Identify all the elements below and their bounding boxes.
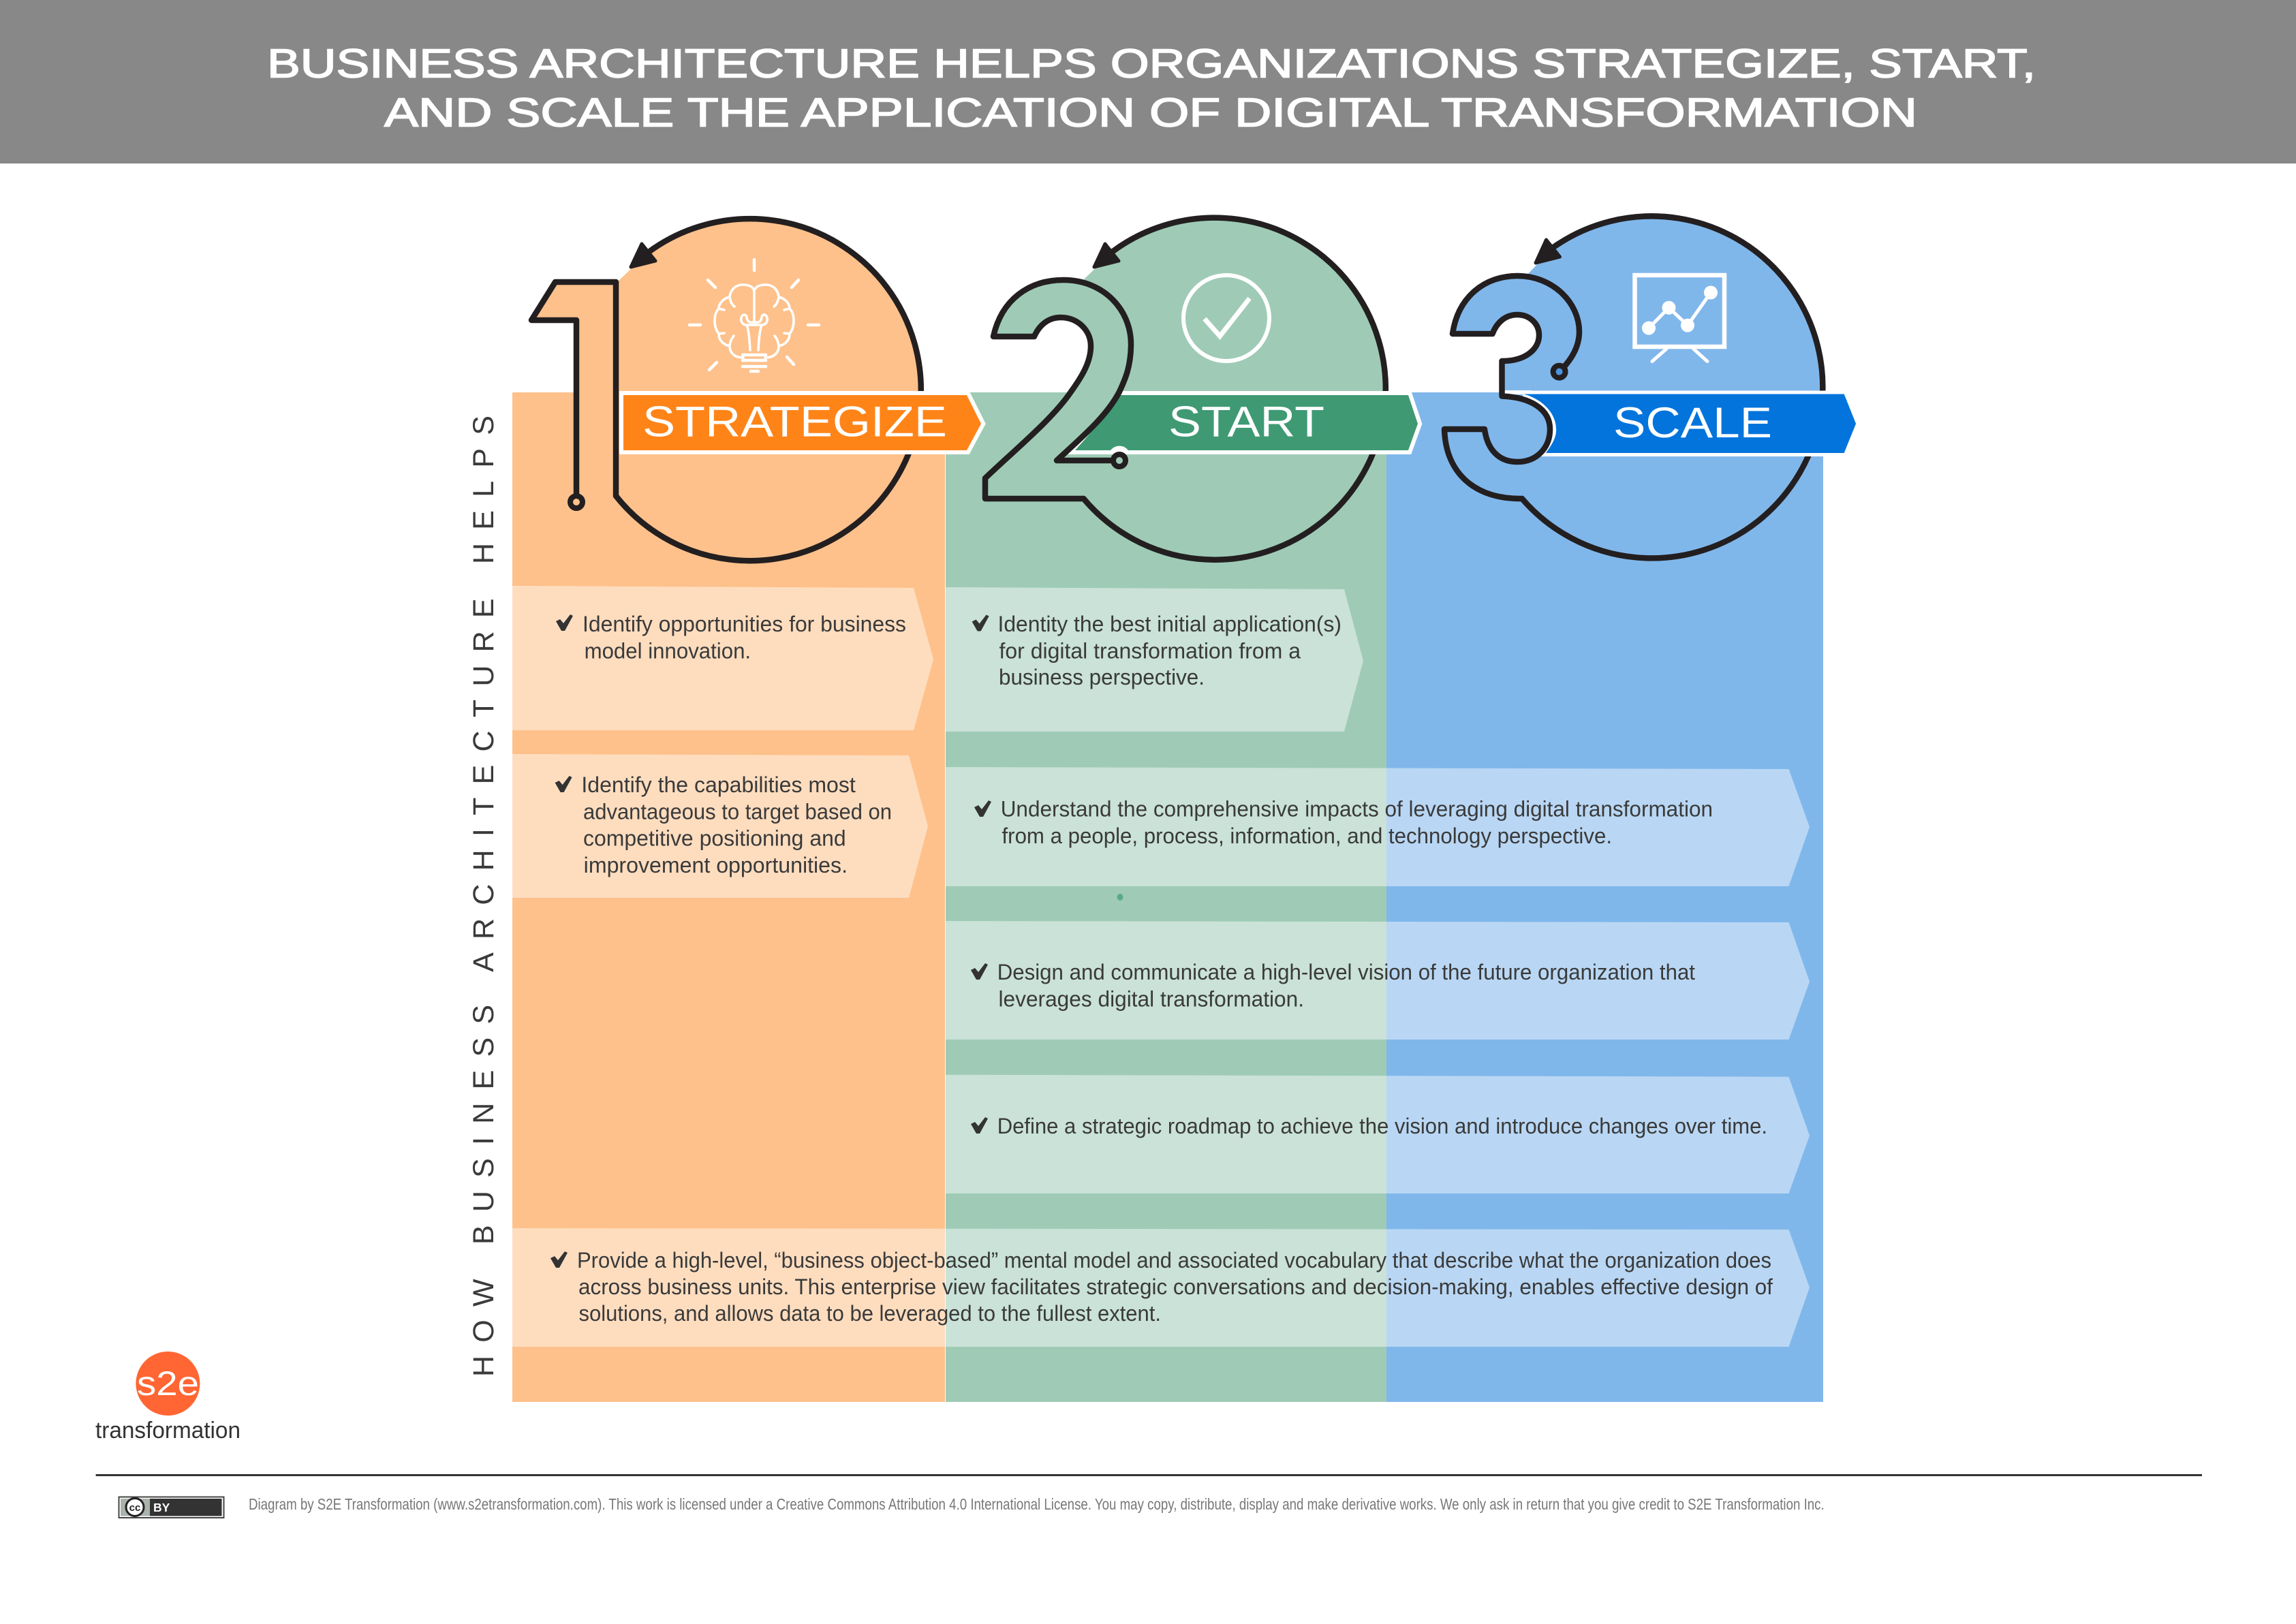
- decorative green dot: [1117, 894, 1123, 901]
- logo: s2e transformation: transformation: [95, 1418, 241, 1443]
- bullet: capabilities: [512, 754, 928, 898]
- numeral 1 with circular arrow: [531, 219, 921, 561]
- circle fill 1: [531, 219, 921, 561]
- bullet: comprehensive impacts: [946, 767, 1810, 886]
- arrowhead 1: [631, 244, 655, 267]
- numeral 2 end dot: [1113, 454, 1126, 467]
- icon: check in circle: [1183, 275, 1269, 361]
- footer rule: [96, 1474, 2202, 1476]
- step 2: start: [985, 218, 1418, 560]
- banner: start: START: [1168, 399, 1324, 446]
- vertical axis label: HOW BUSINESS ARCHITECTURE HELPS: [467, 416, 500, 1377]
- footer credit text: Diagram by S2E Transformation (www.s2etransformation.com). This work is licensed under a Creative Commons Attribution 4.0 International License. You may copy, distribute, display and make derivative works. We only ask in return that you give credit to S2E Transformation Inc.: [249, 1495, 1825, 1513]
- bullet: best initial applications: Identity the best initial application(s): [997, 612, 1341, 636]
- bullet: capabilities: competitive positioning and: [583, 826, 846, 851]
- badge: creative commons by: cc: [129, 1502, 140, 1514]
- circular arrow 3: [1522, 216, 1822, 558]
- banner: strategize: [623, 395, 981, 450]
- bullet: mental model: solutions, and allows data to be leveraged to the fullest extent.: [579, 1301, 1161, 1326]
- bullet: comprehensive impacts: Understand the comprehensive impacts of leveraging digital transformation: [1001, 796, 1713, 821]
- bullet: business model innovation: [512, 586, 933, 730]
- banner: start: [1075, 395, 1418, 450]
- panel: start column: [946, 392, 1386, 1402]
- numeral 3 end dot: [1553, 366, 1566, 378]
- step 3: scale: [1444, 216, 1856, 558]
- numeral 2 outline: [985, 280, 1131, 499]
- bullet: capabilities: Identify the capabilities most: [581, 772, 856, 797]
- bullet: business model innovation: model innovation.: [585, 639, 751, 663]
- bullet: high-level vision: leverages digital transformation.: [999, 987, 1304, 1012]
- numeral 3 outline: [1444, 276, 1579, 499]
- bullet: mental model: [512, 1228, 1810, 1347]
- arrowhead 3: [1536, 240, 1560, 263]
- icon: presentation chart: [1635, 275, 1724, 361]
- bullet: strategic roadmap: [946, 1075, 1810, 1193]
- circle fill 3: [1522, 216, 1822, 558]
- banner: scale: [1504, 390, 1856, 453]
- numeral 1 end dot: [570, 496, 583, 508]
- circle fill 2: [1057, 218, 1385, 560]
- title: AND SCALE THE APPLICATION OF DIGITAL TRANSFORMATION: [384, 90, 1917, 135]
- bullet: best initial applications: business perspective.: [999, 665, 1205, 689]
- icon: lightbulb brain: [689, 260, 819, 371]
- bullet: best initial applications: [946, 587, 1363, 732]
- bullet: business model innovation: Identify opportunities for business: [583, 612, 906, 636]
- logo: s2e transformation: [95, 1352, 241, 1443]
- bullet: comprehensive impacts: from a people, process, information, and technology perspective.: [1002, 824, 1612, 848]
- header band with title: [0, 0, 2296, 163]
- bullet: capabilities: improvement opportunities.: [584, 853, 848, 877]
- badge: creative commons by: [119, 1497, 223, 1518]
- bullet: strategic roadmap: Define a strategic roadmap to achieve the vision and introduce changes over time.: [997, 1114, 1767, 1138]
- numeral 3 fill: [1453, 276, 1579, 396]
- bullet: best initial applications: for digital transformation from a: [999, 639, 1301, 663]
- step 1: strategize: [531, 219, 981, 561]
- banner: scale: SCALE: [1613, 399, 1772, 447]
- circular arrow 2: [1083, 218, 1386, 560]
- bullet: mental model: across business units. This enterprise view facilitates strategic conversations and decision-making, enables effective design of: [578, 1275, 1773, 1299]
- banner: strategize: STRATEGIZE: [642, 399, 947, 446]
- bullet: high-level vision: Design and communicate a high-level vision of the future organization that: [997, 960, 1695, 984]
- panel: scale column: [1386, 392, 1823, 1402]
- numeral 2 fill: [985, 280, 1131, 499]
- title: [267, 41, 2036, 135]
- panel: strategize column: [512, 392, 945, 1402]
- logo: s2e transformation: s2e: [137, 1364, 199, 1403]
- bullet: capabilities: advantageous to target based on: [583, 800, 892, 824]
- bullet: mental model: Provide a high-level, “business object-based” mental model and associated vocabulary that describe what the organization does: [577, 1248, 1771, 1272]
- title: BUSINESS ARCHITECTURE HELPS ORGANIZATIONS STRATEGIZE, START,: [267, 41, 2036, 86]
- bullet: high-level vision: [946, 921, 1810, 1040]
- arrowhead 2: [1094, 244, 1119, 267]
- badge: creative commons by: BY: [153, 1501, 170, 1514]
